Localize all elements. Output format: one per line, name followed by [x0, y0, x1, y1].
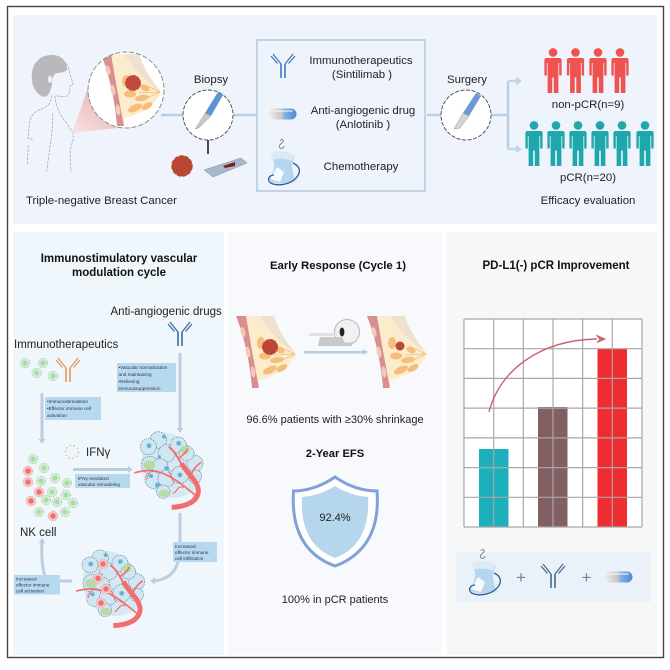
heading: Biopsy: Biopsy [194, 74, 228, 86]
panel: PD-L1 improvement [447, 232, 657, 655]
heading: early response: Early Response (Cycle 1) [270, 260, 406, 272]
callout: vascular normalization [117, 363, 176, 392]
callout: vascular normalization: •Relieving [118, 379, 140, 384]
arrow: tumour to tumour [152, 513, 180, 581]
callout: effector activation: cell activation [16, 588, 45, 594]
callout: effector activation: effector immune [16, 582, 50, 588]
callout: immunostimulation: •Immunostimulation [47, 399, 88, 404]
callout: immunostimulation [45, 397, 101, 420]
icon: CT scanner [309, 320, 360, 346]
callout: effector infiltration: cell infiltration [175, 556, 204, 561]
icon: tissue sample [172, 156, 192, 176]
zoom cone [72, 88, 127, 133]
icon: pill [270, 108, 296, 120]
callout: IFNy remodeling [75, 474, 130, 488]
illustration: patient silhouette [27, 55, 73, 172]
heading: PD-L1: PD-L1(-) pCR Improvement [483, 260, 630, 272]
label: NK cell: NK cell [20, 527, 56, 539]
plus: + [516, 568, 526, 587]
arrow: anti-angiogenic down [176, 353, 184, 433]
label: immunotherapeutics: Immunotherapeutics [14, 339, 118, 351]
icon: microscope slide [204, 158, 247, 177]
icon: immune cells [20, 358, 58, 381]
illustration: tumour microenvironment top [135, 432, 203, 507]
arrow: immuno down [38, 393, 46, 444]
label: IFNy: IFNγ [86, 447, 111, 459]
icon: biopsy needle [183, 90, 233, 140]
icon: shield [293, 477, 377, 566]
arrowhead [150, 578, 155, 584]
panel: early response [228, 232, 442, 655]
cells: NK and effector [23, 454, 78, 521]
label: pCR: pCR(n=20) [560, 172, 616, 184]
icon: antibody blue [168, 322, 192, 346]
callout: effector activation [14, 575, 60, 594]
icon: chemo bag [470, 550, 500, 595]
callout: vascular normalization: •Vascular normalization [118, 365, 168, 370]
illustration: breast before [236, 316, 296, 388]
arrowhead [38, 538, 46, 543]
bar: brown [538, 407, 568, 527]
icon: antibody orange [56, 358, 80, 382]
arrow: improvement trend [489, 336, 605, 412]
label: non-pCR: non-pCR(n=9) [552, 99, 624, 111]
callout: effector infiltration: effector immune [175, 550, 209, 555]
icon: pill [606, 572, 632, 582]
label: anti-angiogenic drugs: Anti-angiogenic drugs [110, 306, 222, 318]
people: pCR [525, 121, 654, 166]
bar chart [464, 319, 642, 527]
callout: effector activation: Increased [16, 576, 37, 582]
icon: scalpel [441, 90, 491, 140]
panel: combination therapy [456, 550, 651, 602]
people: non-pCR [544, 48, 629, 93]
callout: vascular normalization: and maintaining [118, 372, 152, 377]
plus: + [582, 568, 592, 587]
label: efficacy evaluation: Efficacy evaluation [541, 195, 635, 207]
bar: red [598, 349, 627, 527]
heading: Surgery: Surgery [447, 74, 487, 86]
arrow: activation to NK [42, 542, 72, 581]
value: 92.4%: 92.4% [319, 512, 351, 524]
text: immunotherapeutics: Immunotherapeutics [309, 55, 413, 67]
arrow: before to after [304, 349, 368, 355]
callout: immunostimulation: activation [47, 413, 67, 418]
panel: immunostimulatory cycle [13, 232, 224, 655]
arrow: to pCR [508, 146, 520, 152]
callout: effector infiltration [173, 542, 217, 562]
callout: effector infiltration: Increased [175, 544, 196, 549]
text: Sintilimab: (Sintilimab ) [332, 69, 392, 81]
panel: treatment workflow [13, 15, 657, 224]
inset: breast with tumour [88, 52, 164, 128]
callout: IFNy remodeling: IFNγ-mediated [78, 476, 109, 481]
arrow: to non-pCR [508, 78, 520, 84]
icon: antibody [271, 54, 295, 78]
text: shrinkage: 96.6% patients with ≥30% shrinkage [246, 414, 424, 426]
text: Anlotinib: (Anlotinib ) [336, 119, 390, 131]
heading: cycle title: modulation cycle [72, 267, 166, 279]
callout: vascular normalization: immunosuppression [118, 386, 161, 391]
icon: IFN gamma dots [66, 446, 78, 458]
connector [161, 81, 508, 149]
callout: immunostimulation: •Effector immune cell [47, 406, 91, 411]
icon: chemo bag [269, 140, 299, 185]
icon: antibody [541, 564, 565, 588]
effector cells [93, 559, 111, 608]
arrow: IFNy to tumour [73, 466, 133, 473]
text: chemotherapy: Chemotherapy [324, 161, 399, 173]
illustration: tumour microenvironment bottom [77, 550, 145, 626]
box: therapies [257, 40, 425, 191]
connector [207, 140, 209, 154]
heading: cycle title: Immunostimulatory vascular [41, 253, 198, 265]
heading: 2-Year EFS: 2-Year EFS [306, 448, 365, 460]
text: pCR patients: 100% in pCR patients [282, 594, 389, 606]
text: anti-angiogenic: Anti-angiogenic drug [311, 105, 415, 117]
callout: IFNy remodeling: vascular remodeling [78, 482, 120, 487]
bar: teal [479, 449, 508, 527]
label: triple-negative breast cancer: Triple-negative Breast Cancer [26, 195, 177, 207]
illustration: breast after [367, 316, 427, 388]
